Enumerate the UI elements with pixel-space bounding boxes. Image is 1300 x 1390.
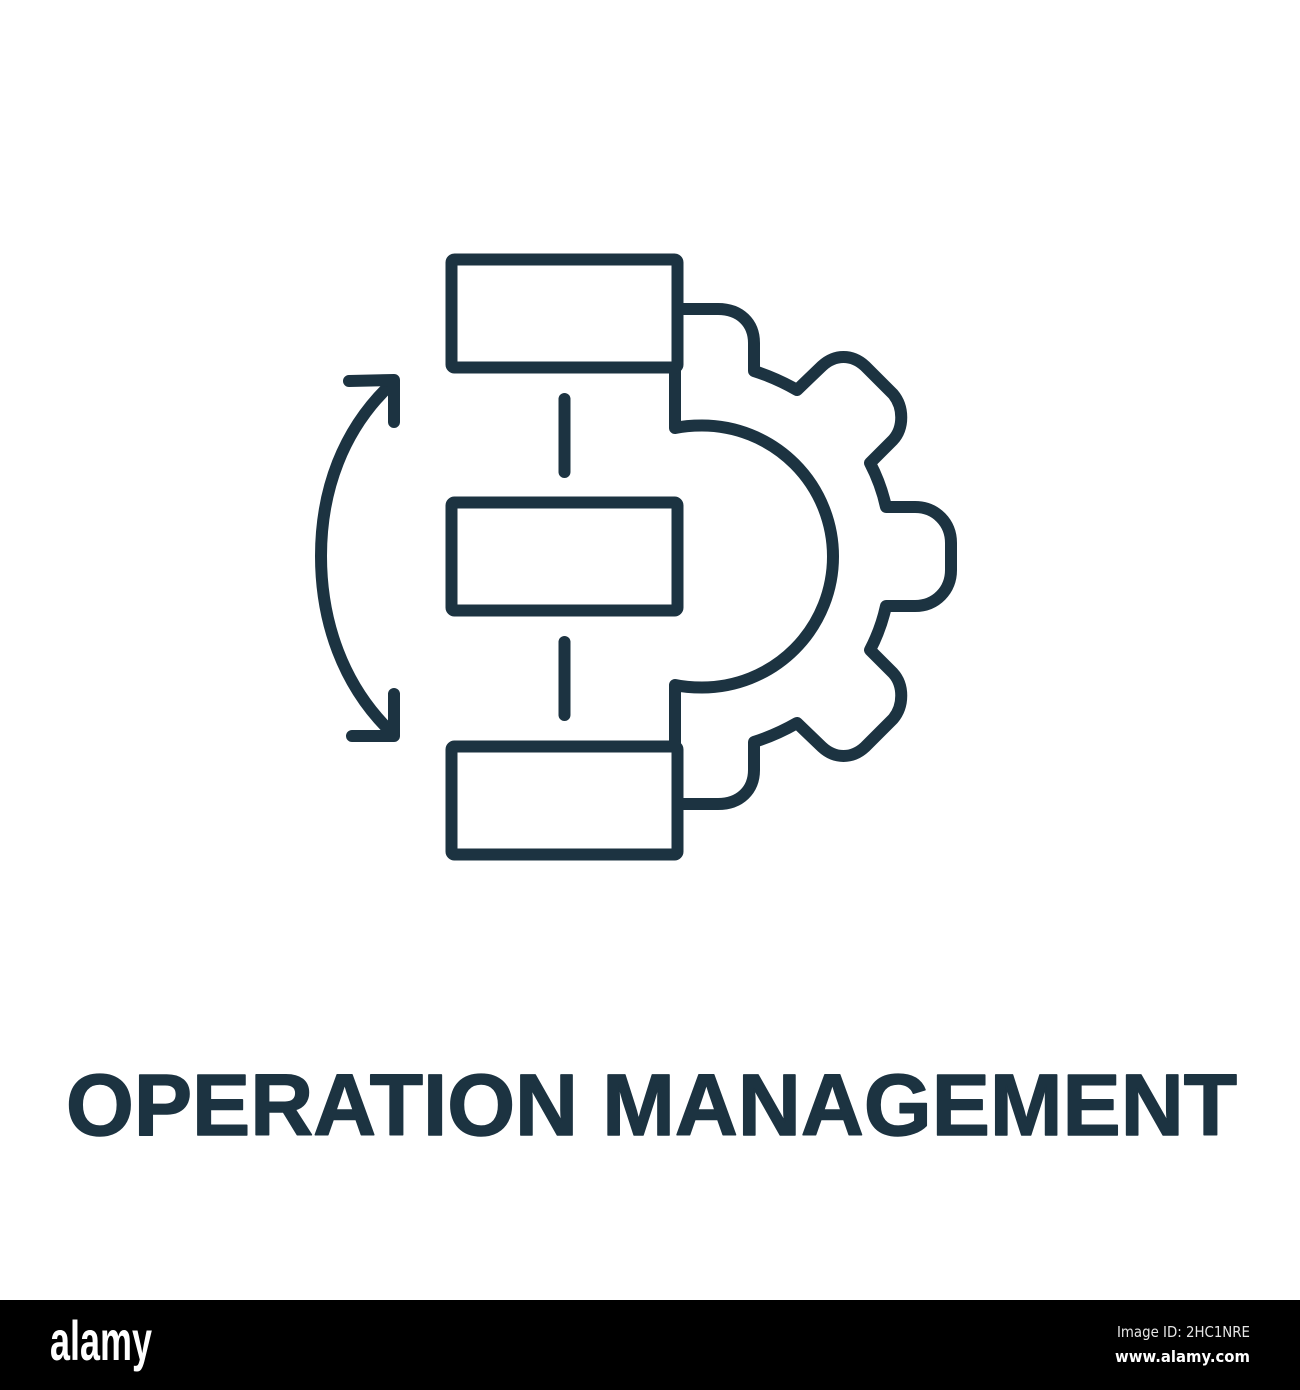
icon: lower connector bbox=[558, 642, 570, 715]
arrow: cycle between blocks bbox=[321, 380, 394, 736]
icon: middle block bbox=[452, 502, 678, 610]
icon: inner half circle bbox=[675, 367, 833, 746]
footer bar bbox=[0, 1300, 1300, 1390]
icon: operation management bbox=[321, 260, 951, 854]
title: OPERATION MANAGEMENT bbox=[66, 1057, 1237, 1154]
icon: upper connector bbox=[558, 399, 570, 472]
watermark logo: alamy bbox=[50, 1309, 152, 1372]
icon: top block bbox=[452, 260, 678, 368]
website: www.alamy.com bbox=[1115, 1347, 1250, 1366]
icon: gear outline bbox=[677, 309, 951, 804]
icon: bottom block bbox=[452, 746, 678, 854]
image id: Image ID: 2HC1NRE bbox=[1117, 1323, 1250, 1341]
